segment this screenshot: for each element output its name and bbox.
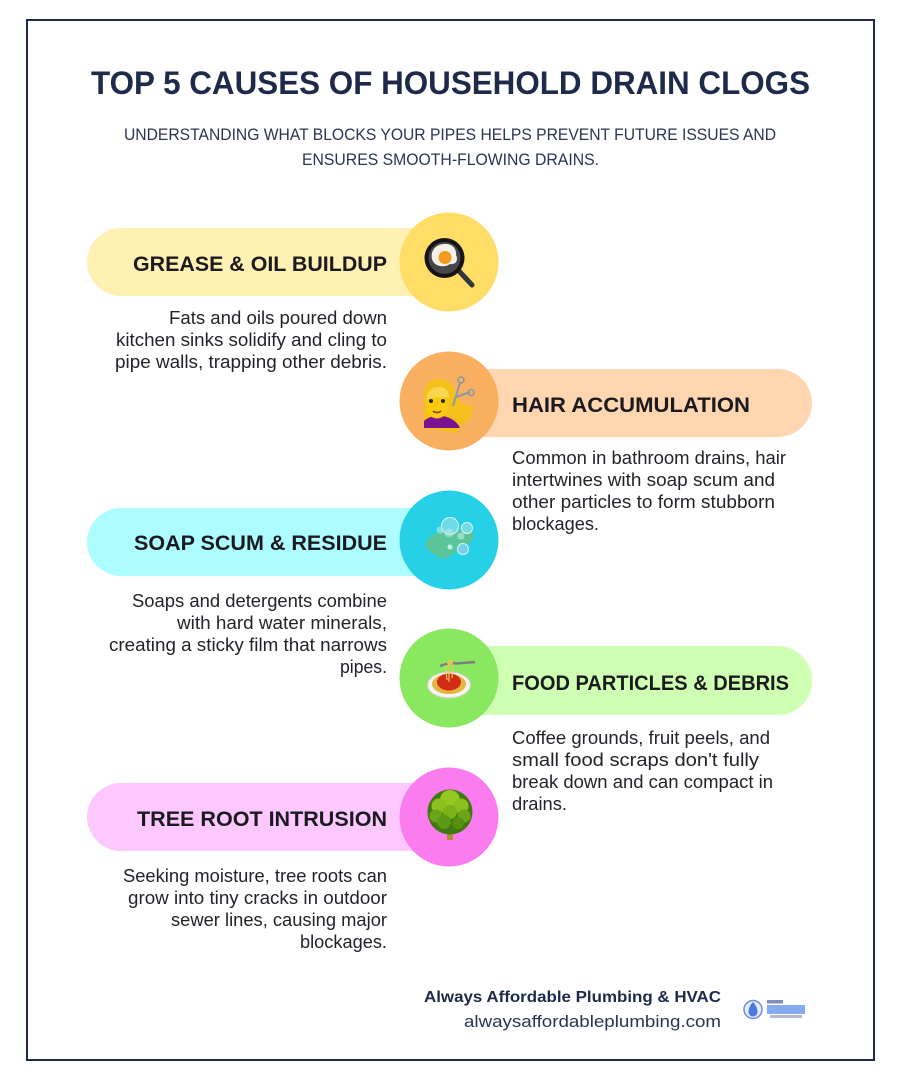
panel: grease and oil buildup — [87, 212, 498, 372]
tree description: grow into tiny cracks in outdoor — [128, 888, 387, 908]
icon: woman getting haircut — [424, 377, 474, 433]
hair description: Common in bathroom drains, hair — [512, 448, 786, 468]
grease description: pipe walls, trapping other debris. — [115, 352, 387, 372]
subtitle — [124, 126, 776, 169]
company name: Always Affordable Plumbing & HVAC — [424, 989, 721, 1006]
panel: tree root intrusion — [87, 768, 498, 952]
grease description — [115, 308, 387, 372]
grease pill — [87, 228, 449, 296]
subtitle: UNDERSTANDING WHAT BLOCKS YOUR PIPES HELPS PREVENT FUTURE ISSUES AND — [124, 126, 776, 144]
hair circle — [400, 352, 498, 450]
tree circle — [400, 768, 498, 866]
hair description: intertwines with soap scum and — [512, 470, 775, 490]
grease heading: GREASE & OIL BUILDUP — [133, 253, 387, 276]
food description: small food scraps don't fully — [512, 750, 759, 770]
soap description: pipes. — [340, 657, 387, 677]
food circle — [400, 628, 498, 728]
tree description: Seeking moisture, tree roots can — [123, 866, 387, 886]
soap circle — [400, 490, 498, 590]
logo — [744, 1000, 805, 1018]
hair pill — [449, 369, 812, 437]
icon: soap with bubbles — [425, 518, 474, 559]
hair heading: HAIR ACCUMULATION — [512, 394, 750, 417]
icon: tree — [428, 790, 472, 840]
hair description: other particles to form stubborn — [512, 492, 775, 512]
food description: break down and can compact in — [512, 772, 773, 792]
food pill — [449, 646, 812, 715]
tree description: blockages. — [300, 932, 387, 952]
icon: frying pan with egg — [424, 238, 472, 285]
food description: Coffee grounds, fruit peels, and — [512, 728, 770, 748]
food description: drains. — [512, 794, 567, 814]
title: TOP 5 CAUSES OF HOUSEHOLD DRAIN CLOGS — [91, 65, 810, 101]
tree heading: TREE ROOT INTRUSION — [137, 808, 387, 831]
soap description: Soaps and detergents combine — [132, 591, 387, 611]
icon: spaghetti — [428, 660, 475, 698]
tree description — [123, 866, 387, 952]
panel: food particles and debris — [400, 628, 812, 814]
food description — [512, 728, 773, 814]
panel: soap scum and residue — [87, 490, 498, 677]
soap description: with hard water minerals, — [176, 613, 387, 633]
grease circle — [400, 212, 498, 312]
food heading: FOOD PARTICLES & DEBRIS — [512, 672, 789, 695]
hair description: blockages. — [512, 514, 599, 534]
footer — [424, 989, 805, 1031]
soap pill — [87, 508, 449, 576]
panel: hair accumulation — [400, 352, 812, 534]
subtitle: ENSURES SMOOTH-FLOWING DRAINS. — [302, 151, 599, 169]
soap description: creating a sticky film that narrows — [109, 635, 387, 655]
soap heading: SOAP SCUM & RESIDUE — [134, 532, 387, 555]
tree pill — [87, 783, 449, 851]
website: alwaysaffordableplumbing.com — [464, 1012, 721, 1031]
grease description: kitchen sinks solidify and cling to — [116, 330, 387, 350]
grease description: Fats and oils poured down — [169, 308, 387, 328]
tree description: sewer lines, causing major — [171, 910, 387, 930]
soap description — [109, 591, 387, 677]
hair description — [512, 448, 786, 534]
